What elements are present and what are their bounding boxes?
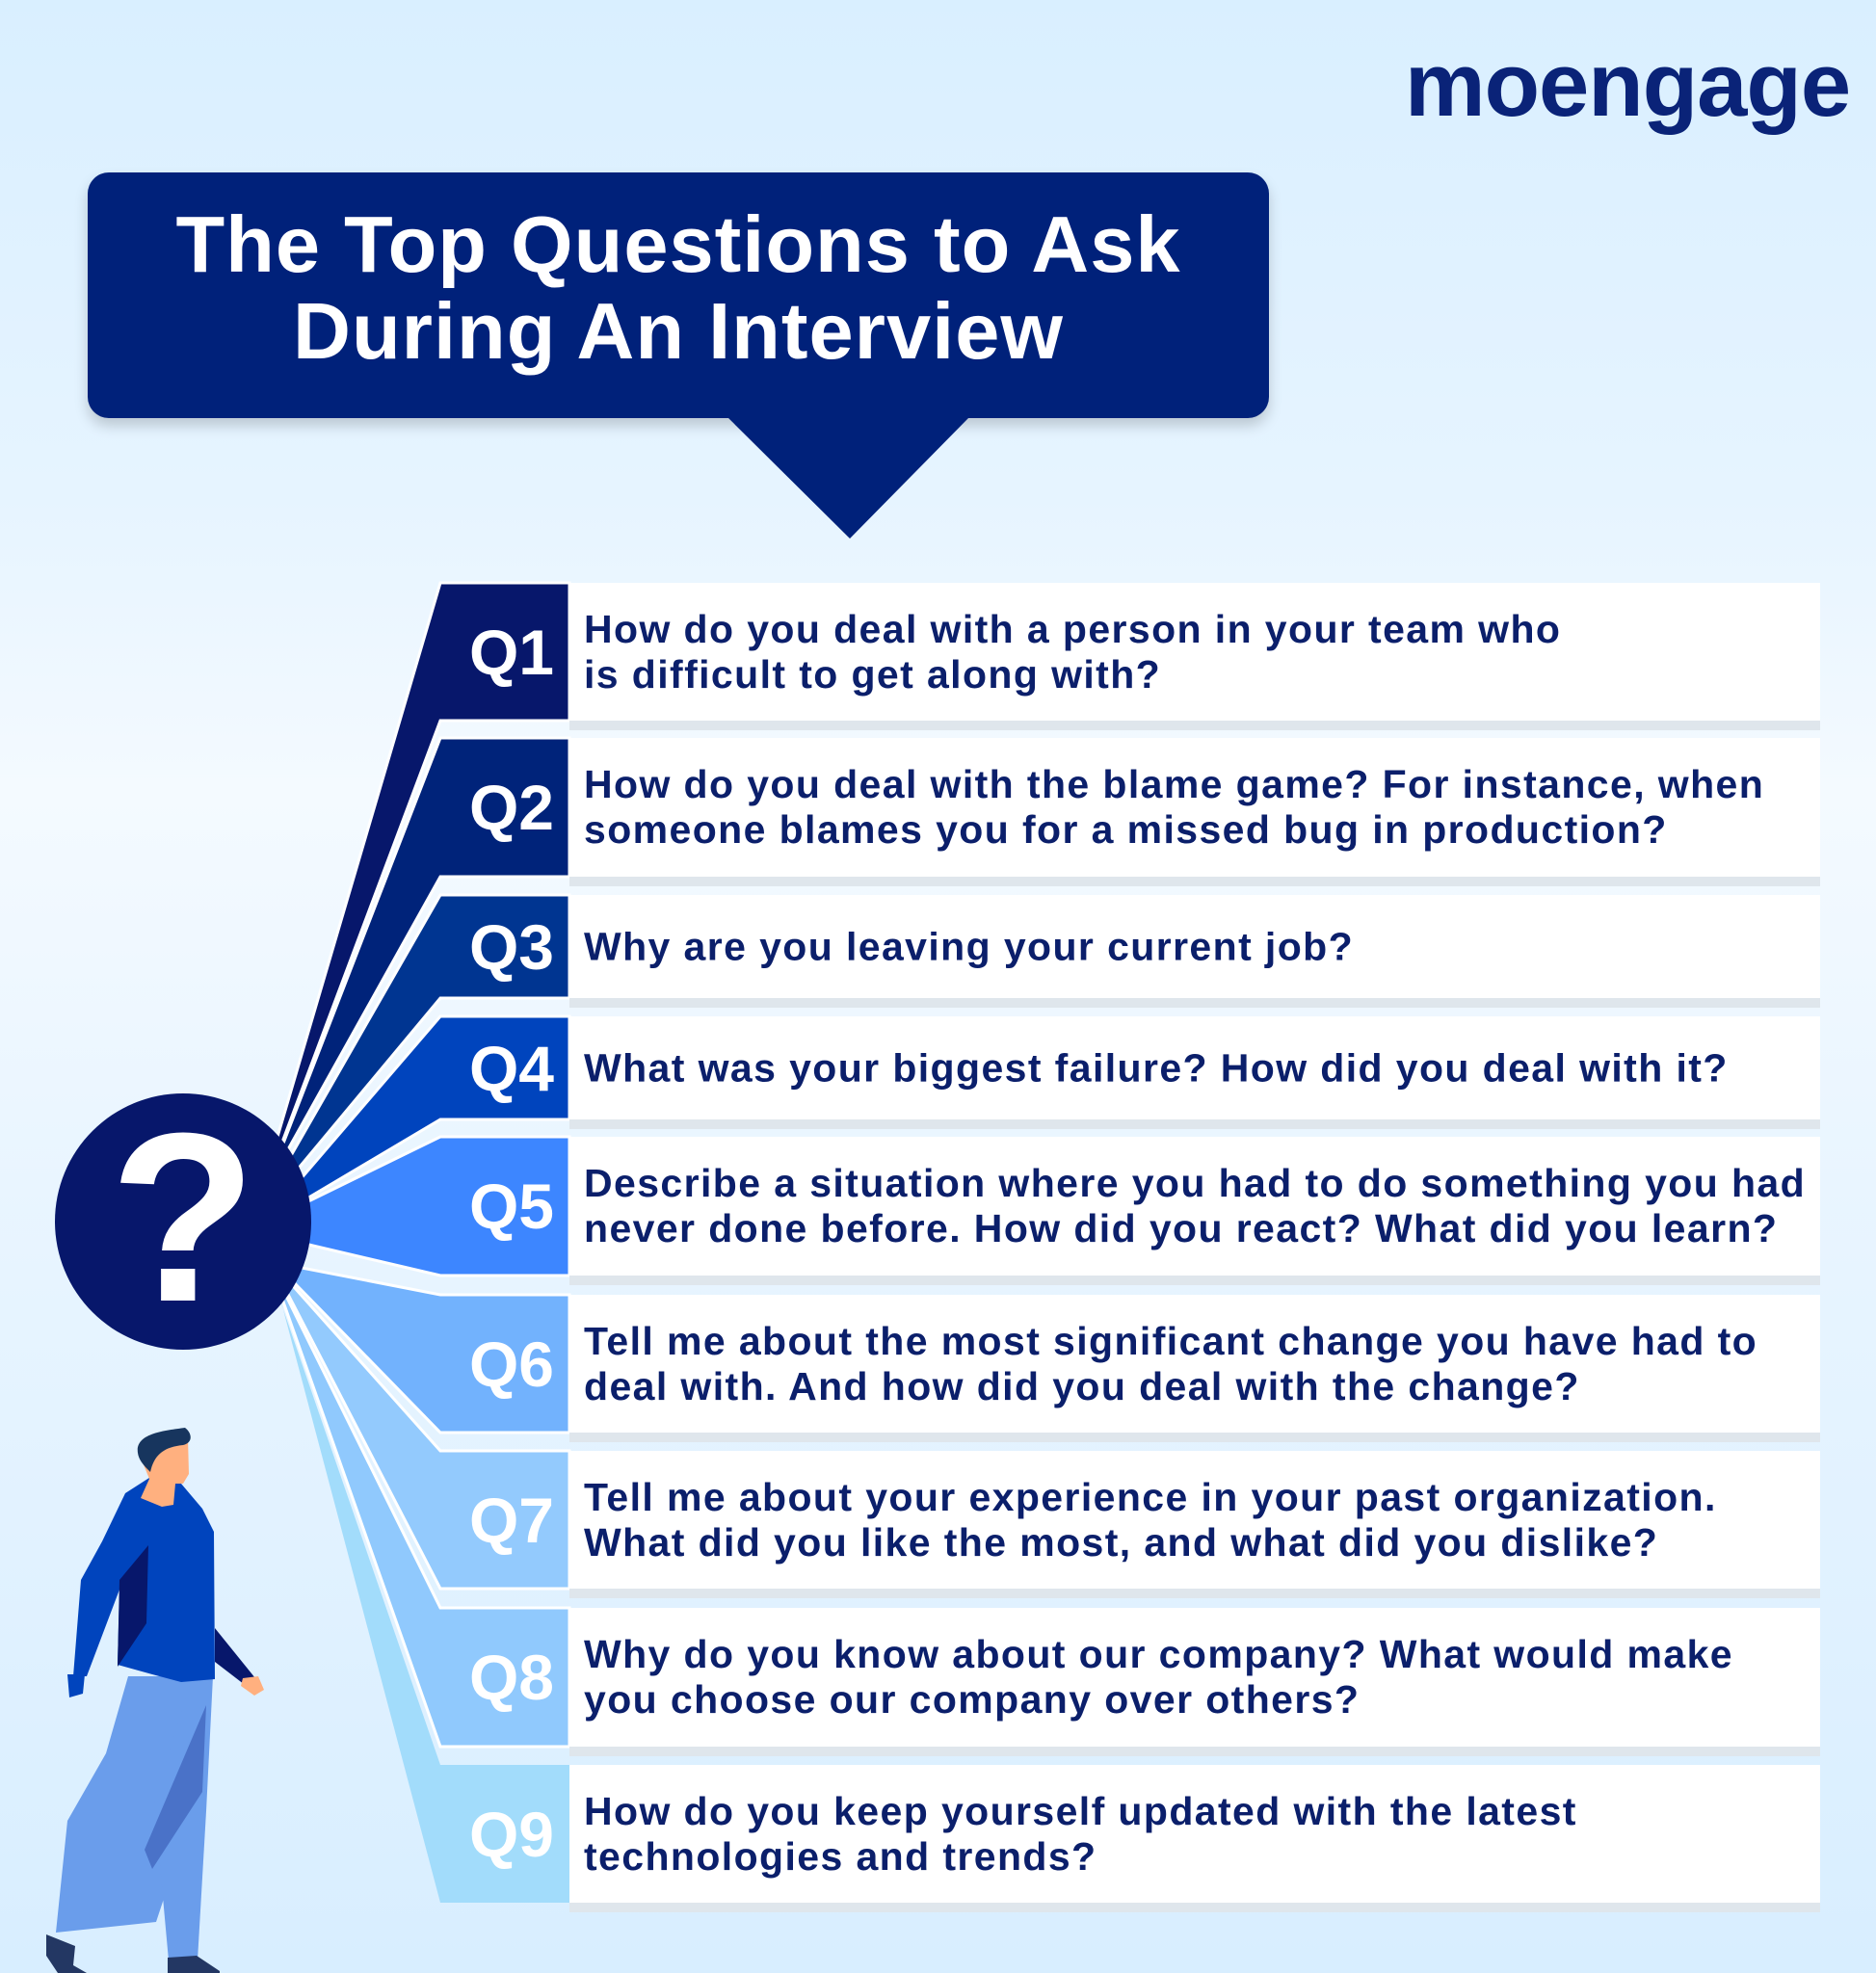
title text: During An Interview xyxy=(293,286,1064,376)
title text: The Top Questions to Ask xyxy=(175,199,1181,289)
row Q6 xyxy=(569,1295,1820,1433)
row Q2 xyxy=(569,738,1820,877)
row Q3 xyxy=(569,895,1820,998)
row Q1 xyxy=(569,583,1820,721)
row Q8: Why do you know about our company? What would make xyxy=(584,1632,1733,1676)
row Q1: is difficult to get along with? xyxy=(584,651,1161,696)
row Q6: Tell me about the most significant change you have had to xyxy=(584,1318,1757,1362)
row Q2: someone blames you for a missed bug in production? xyxy=(584,807,1668,852)
row Q4 xyxy=(569,1016,1820,1119)
row Q5 xyxy=(569,1137,1820,1276)
text: Q5 xyxy=(469,1171,554,1242)
row Q7: Tell me about your experience in your past organization. xyxy=(584,1474,1717,1518)
icon: question circle xyxy=(55,1087,311,1352)
row Q9 xyxy=(569,1765,1820,1903)
text: Q7 xyxy=(469,1484,554,1555)
row Q5: never done before. How did you react? What did you learn? xyxy=(584,1206,1778,1250)
text: Q3 xyxy=(469,911,554,983)
row Q2: How do you deal with the blame game? For instance, when xyxy=(584,762,1764,806)
row Q8 xyxy=(569,1608,1820,1747)
row Q6: deal with. And how did you deal with the change? xyxy=(584,1364,1580,1408)
row Q1: How do you deal with a person in your team who xyxy=(584,607,1561,651)
person illustration xyxy=(46,1428,264,1973)
title banner xyxy=(88,172,1269,418)
text: Q2 xyxy=(469,772,554,843)
row Q9: technologies and trends? xyxy=(584,1834,1097,1879)
text: Q6 xyxy=(469,1328,554,1399)
logo: moengage xyxy=(1405,34,1850,135)
text: Q9 xyxy=(469,1798,554,1869)
row Q4: What was your biggest failure? How did you deal with it? xyxy=(584,1045,1729,1090)
icon: question circle: ? xyxy=(110,1087,256,1352)
title text xyxy=(175,199,1181,376)
row Q7 xyxy=(569,1451,1820,1589)
row Q8: you choose our company over others? xyxy=(584,1677,1360,1722)
text: Q4 xyxy=(469,1033,554,1104)
row Q9: How do you keep yourself updated with the latest xyxy=(584,1788,1577,1832)
question labels: Q1 xyxy=(469,617,554,688)
row Q7: What did you like the most, and what did you dislike? xyxy=(584,1520,1658,1565)
row Q3: Why are you leaving your current job? xyxy=(584,924,1354,968)
text: Q8 xyxy=(469,1642,554,1713)
row Q5: Describe a situation where you had to do something you had xyxy=(584,1161,1806,1205)
